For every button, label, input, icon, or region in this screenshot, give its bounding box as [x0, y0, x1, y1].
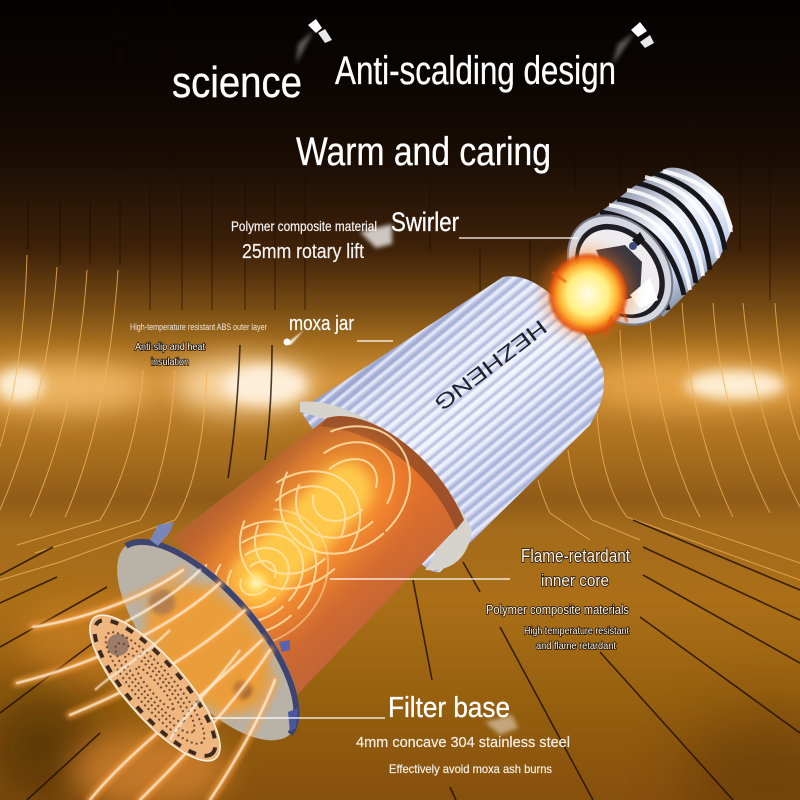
callout line: moxa jar [357, 340, 393, 342]
dark floor seams [0, 345, 800, 800]
label: 25mm rotary lift: 25mm rotary lift [242, 241, 364, 263]
label: flame-retardant inner core [521, 546, 630, 590]
label: polymer composite material: Polymer composite material [231, 218, 377, 234]
label: Filter base: Filter base [388, 692, 510, 724]
swirler threaded body [577, 168, 733, 317]
label: anti-slip and heat insulation [135, 342, 205, 368]
heading: Anti-scalding design: Anti-scalding design [335, 49, 616, 93]
callout line: core [330, 578, 510, 580]
label: 4mm concave stainless steel: 4mm concave 304 stainless steel [356, 734, 570, 751]
swirler coil assembly [546, 168, 733, 346]
filter base disc [117, 522, 300, 740]
upper thin dark wall seams [28, 0, 770, 310]
inner core with swirling flame [160, 400, 464, 695]
icon: left spotlight sparkle [296, 19, 332, 64]
brand mark on jar: HEZHENG [430, 315, 551, 415]
label: avoid moxa ash burns: Effectively avoid moxa ash burns [389, 762, 552, 776]
callout line: filter base [210, 717, 385, 719]
label: flame-retardant inner core: Flame-retardant [521, 546, 630, 566]
filter mesh plate [89, 614, 242, 762]
label: high-temperature ABS outer layer: High-temperature resistant ABS outer layer [130, 322, 267, 332]
moxa jar ribbed shell [300, 276, 604, 572]
heat rays from filter [17, 570, 275, 800]
callout line: swirler [459, 237, 578, 239]
label: high temperature and flame retardant: High temperature resistant [524, 626, 629, 637]
heading: Warm and caring: Warm and caring [296, 130, 551, 174]
golden curved seams right [538, 303, 800, 580]
heading: science: science [172, 58, 302, 107]
swirler open end with vanes [546, 194, 694, 346]
label: high temperature and flame retardant [524, 626, 629, 652]
glint near swirler label [360, 224, 392, 248]
swirl glow [200, 424, 411, 642]
label: anti-slip and heat insulation: Anti-slip and heat [135, 342, 205, 353]
golden curved seams left [0, 255, 207, 580]
label: Swirler: Swirler [391, 207, 459, 237]
glint near moxa jar label [284, 330, 304, 346]
icon: right spotlight sparkle [612, 22, 654, 66]
label: flame-retardant inner core: inner core [541, 571, 609, 590]
jar inner rim [300, 402, 472, 570]
label: high temperature and flame retardant: and flame retardant [536, 641, 616, 652]
glint near filter base label [485, 715, 518, 735]
label: polymer composite materials: Polymer composite materials [486, 602, 629, 617]
label: moxa jar: moxa jar [289, 313, 354, 335]
label: anti-slip and heat insulation: insulation [151, 357, 189, 368]
flame burst between jar and swirler [542, 247, 634, 339]
